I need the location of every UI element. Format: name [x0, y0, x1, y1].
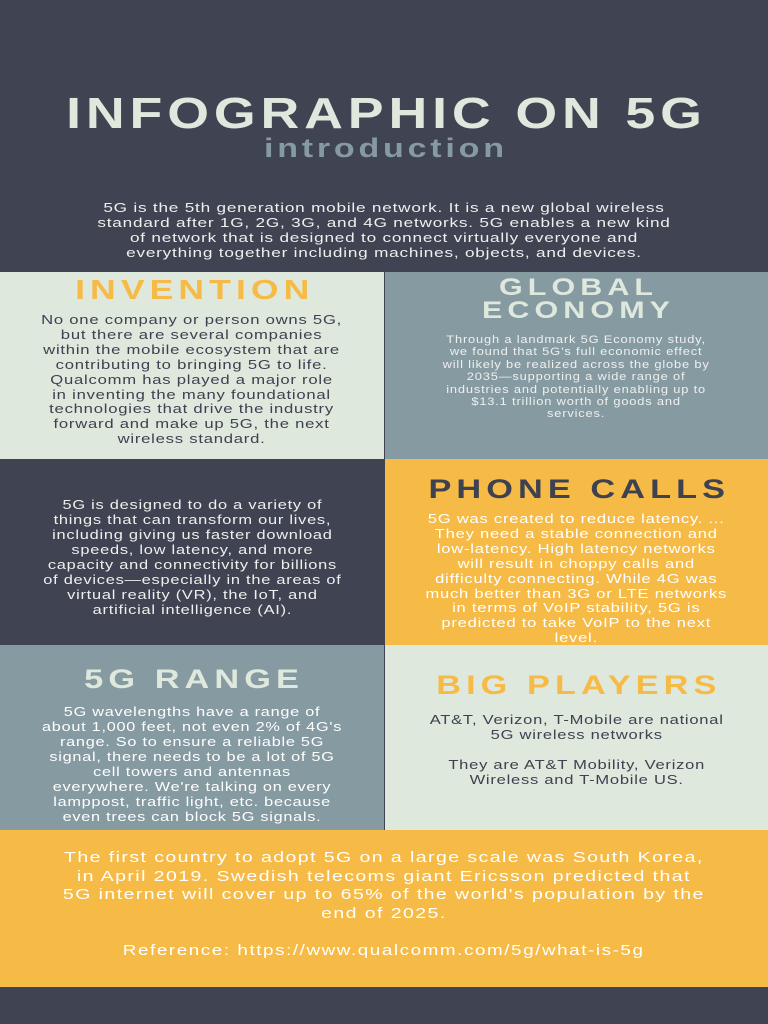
text: capabilities: including giving us faster download	[52, 527, 332, 542]
text: big players: They are AT&T Mobility, Verizon	[448, 757, 705, 772]
text: phone calls: difficulty connecting. While 4G was	[435, 572, 718, 586]
text: 5g range: range. So to ensure a reliable 5G	[60, 734, 324, 749]
text: invention: forward and make up 5G, the next	[54, 416, 330, 431]
text: invention: wireless standard.	[118, 431, 266, 446]
text: global economy: 2035—supporting a wide range of	[467, 371, 686, 383]
text: 5g range: everywhere. We're talking on every	[53, 779, 331, 794]
heading: invention: INVENTION	[75, 274, 314, 305]
panel: capabilities	[0, 459, 384, 645]
intro text	[97, 200, 671, 260]
text: global economy	[442, 334, 710, 420]
heading: global economy	[483, 274, 676, 324]
heading: global economy: ECONOMY	[483, 297, 676, 324]
text: global economy: Through a landmark 5G Economy study,	[447, 334, 706, 346]
heading: phone calls: PHONE CALLS	[428, 474, 730, 504]
heading: big players: BIG PLAYERS	[436, 670, 722, 700]
text: capabilities: capacity and connectivity for billions	[47, 557, 337, 572]
text: 5g range: signal, there needs to be a lot of 5G	[49, 749, 335, 764]
text: invention: within the mobile ecosystem that are	[44, 342, 340, 357]
intro text: everything together including machines, objects, and devices.	[126, 245, 642, 260]
text: invention: No one company or person owns 5G,	[42, 312, 342, 327]
text: phone calls: much better than 3G or LTE networks	[426, 587, 727, 601]
text: invention: in inventing the many foundational	[53, 387, 331, 402]
text: big players: AT&T, Verizon, T-Mobile are national	[430, 712, 723, 727]
text: invention: contributing to bringing 5G to life.	[56, 357, 328, 372]
text: conclusion: in April 2019. Swedish telecoms giant Ericsson predicted that	[77, 868, 691, 885]
panel: phone calls	[385, 459, 768, 645]
text: capabilities: virtual reality (VR), the IoT, and	[67, 587, 317, 602]
text: big players	[430, 712, 723, 787]
text: phone calls: predicted to take VoIP to the next	[442, 616, 711, 630]
text: capabilities: speeds, low latency, and more	[71, 542, 313, 557]
intro text: standard after 1G, 2G, 3G, and 4G networks. 5G enables a new kind	[97, 215, 671, 230]
text: phone calls: level.	[555, 631, 598, 645]
text: conclusion: The first country to adopt 5G on a large scale was South Korea,	[64, 849, 704, 866]
text: phone calls: 5G was created to reduce latency. ...	[428, 512, 725, 526]
text: capabilities: 5G is designed to do a variety of	[62, 497, 322, 512]
text: 5g range: 5G wavelengths have a range of	[64, 704, 320, 719]
text: invention: but there are several companies	[61, 327, 323, 342]
text: 5g range: cell towers and antennas	[93, 764, 291, 779]
text: 5g range: even trees can block 5G signals.	[63, 809, 321, 824]
title: INFOGRAPHIC ON 5G	[66, 89, 707, 138]
text: conclusion: 5G internet will cover up to 65% of the world's population by the	[63, 886, 705, 903]
text: invention: Qualcomm has played a major role	[51, 372, 333, 387]
text: phone calls: will result in choppy calls and	[458, 557, 695, 571]
text: capabilities: of devices—especially in the areas of	[43, 572, 341, 587]
text: global economy: industries and potentially enabling up to	[447, 384, 706, 396]
text: conclusion	[63, 849, 705, 922]
text: capabilities: things that can transform our lives,	[53, 512, 331, 527]
text: 5g range	[42, 704, 342, 824]
panel: conclusion	[0, 830, 768, 987]
text: big players: 5G wireless networks	[490, 727, 663, 742]
text: capabilities: artificial intelligence (AI).	[92, 602, 292, 617]
heading: global economy: GLOBAL	[499, 274, 659, 301]
intro text: 5G is the 5th generation mobile network. It is a new global wireless	[103, 200, 665, 215]
text: capabilities	[43, 497, 341, 617]
panel: 5g range	[0, 645, 384, 830]
heading: 5g range: 5G RANGE	[85, 664, 304, 694]
text: phone calls: low-latency. High latency networks	[437, 542, 716, 556]
text: invention: technologies that drive the industry	[50, 401, 334, 416]
text: phone calls: in terms of VoIP stability, 5G is	[452, 601, 701, 615]
text: reference: Reference: https://www.qualcomm.com/5g/what-is-5g	[123, 943, 645, 959]
intro text: of network that is designed to connect virtually everyone and	[130, 230, 638, 245]
panel: global economy	[385, 272, 768, 459]
text: global economy: will likely be realized across the globe by	[443, 359, 710, 371]
subtitle: introduction	[264, 133, 508, 163]
text: big players: Wireless and T-Mobile US.	[469, 772, 684, 787]
text: conclusion: end of 2025.	[321, 905, 447, 922]
text: global economy: $13.1 trillion worth of goods and	[472, 396, 681, 408]
text: invention	[42, 312, 342, 446]
text: 5g range: about 1,000 feet, not even 2% of 4G's	[42, 719, 342, 734]
text: 5g range: lamppost, traffic light, etc. because	[53, 794, 331, 809]
text: global economy: we found that 5G’s full economic effect	[450, 346, 703, 358]
panel: big players	[385, 645, 768, 830]
text: phone calls	[426, 512, 727, 645]
text: global economy: services.	[547, 408, 606, 420]
panel: invention	[0, 272, 384, 459]
text: phone calls: They need a stable connection and	[435, 527, 718, 541]
